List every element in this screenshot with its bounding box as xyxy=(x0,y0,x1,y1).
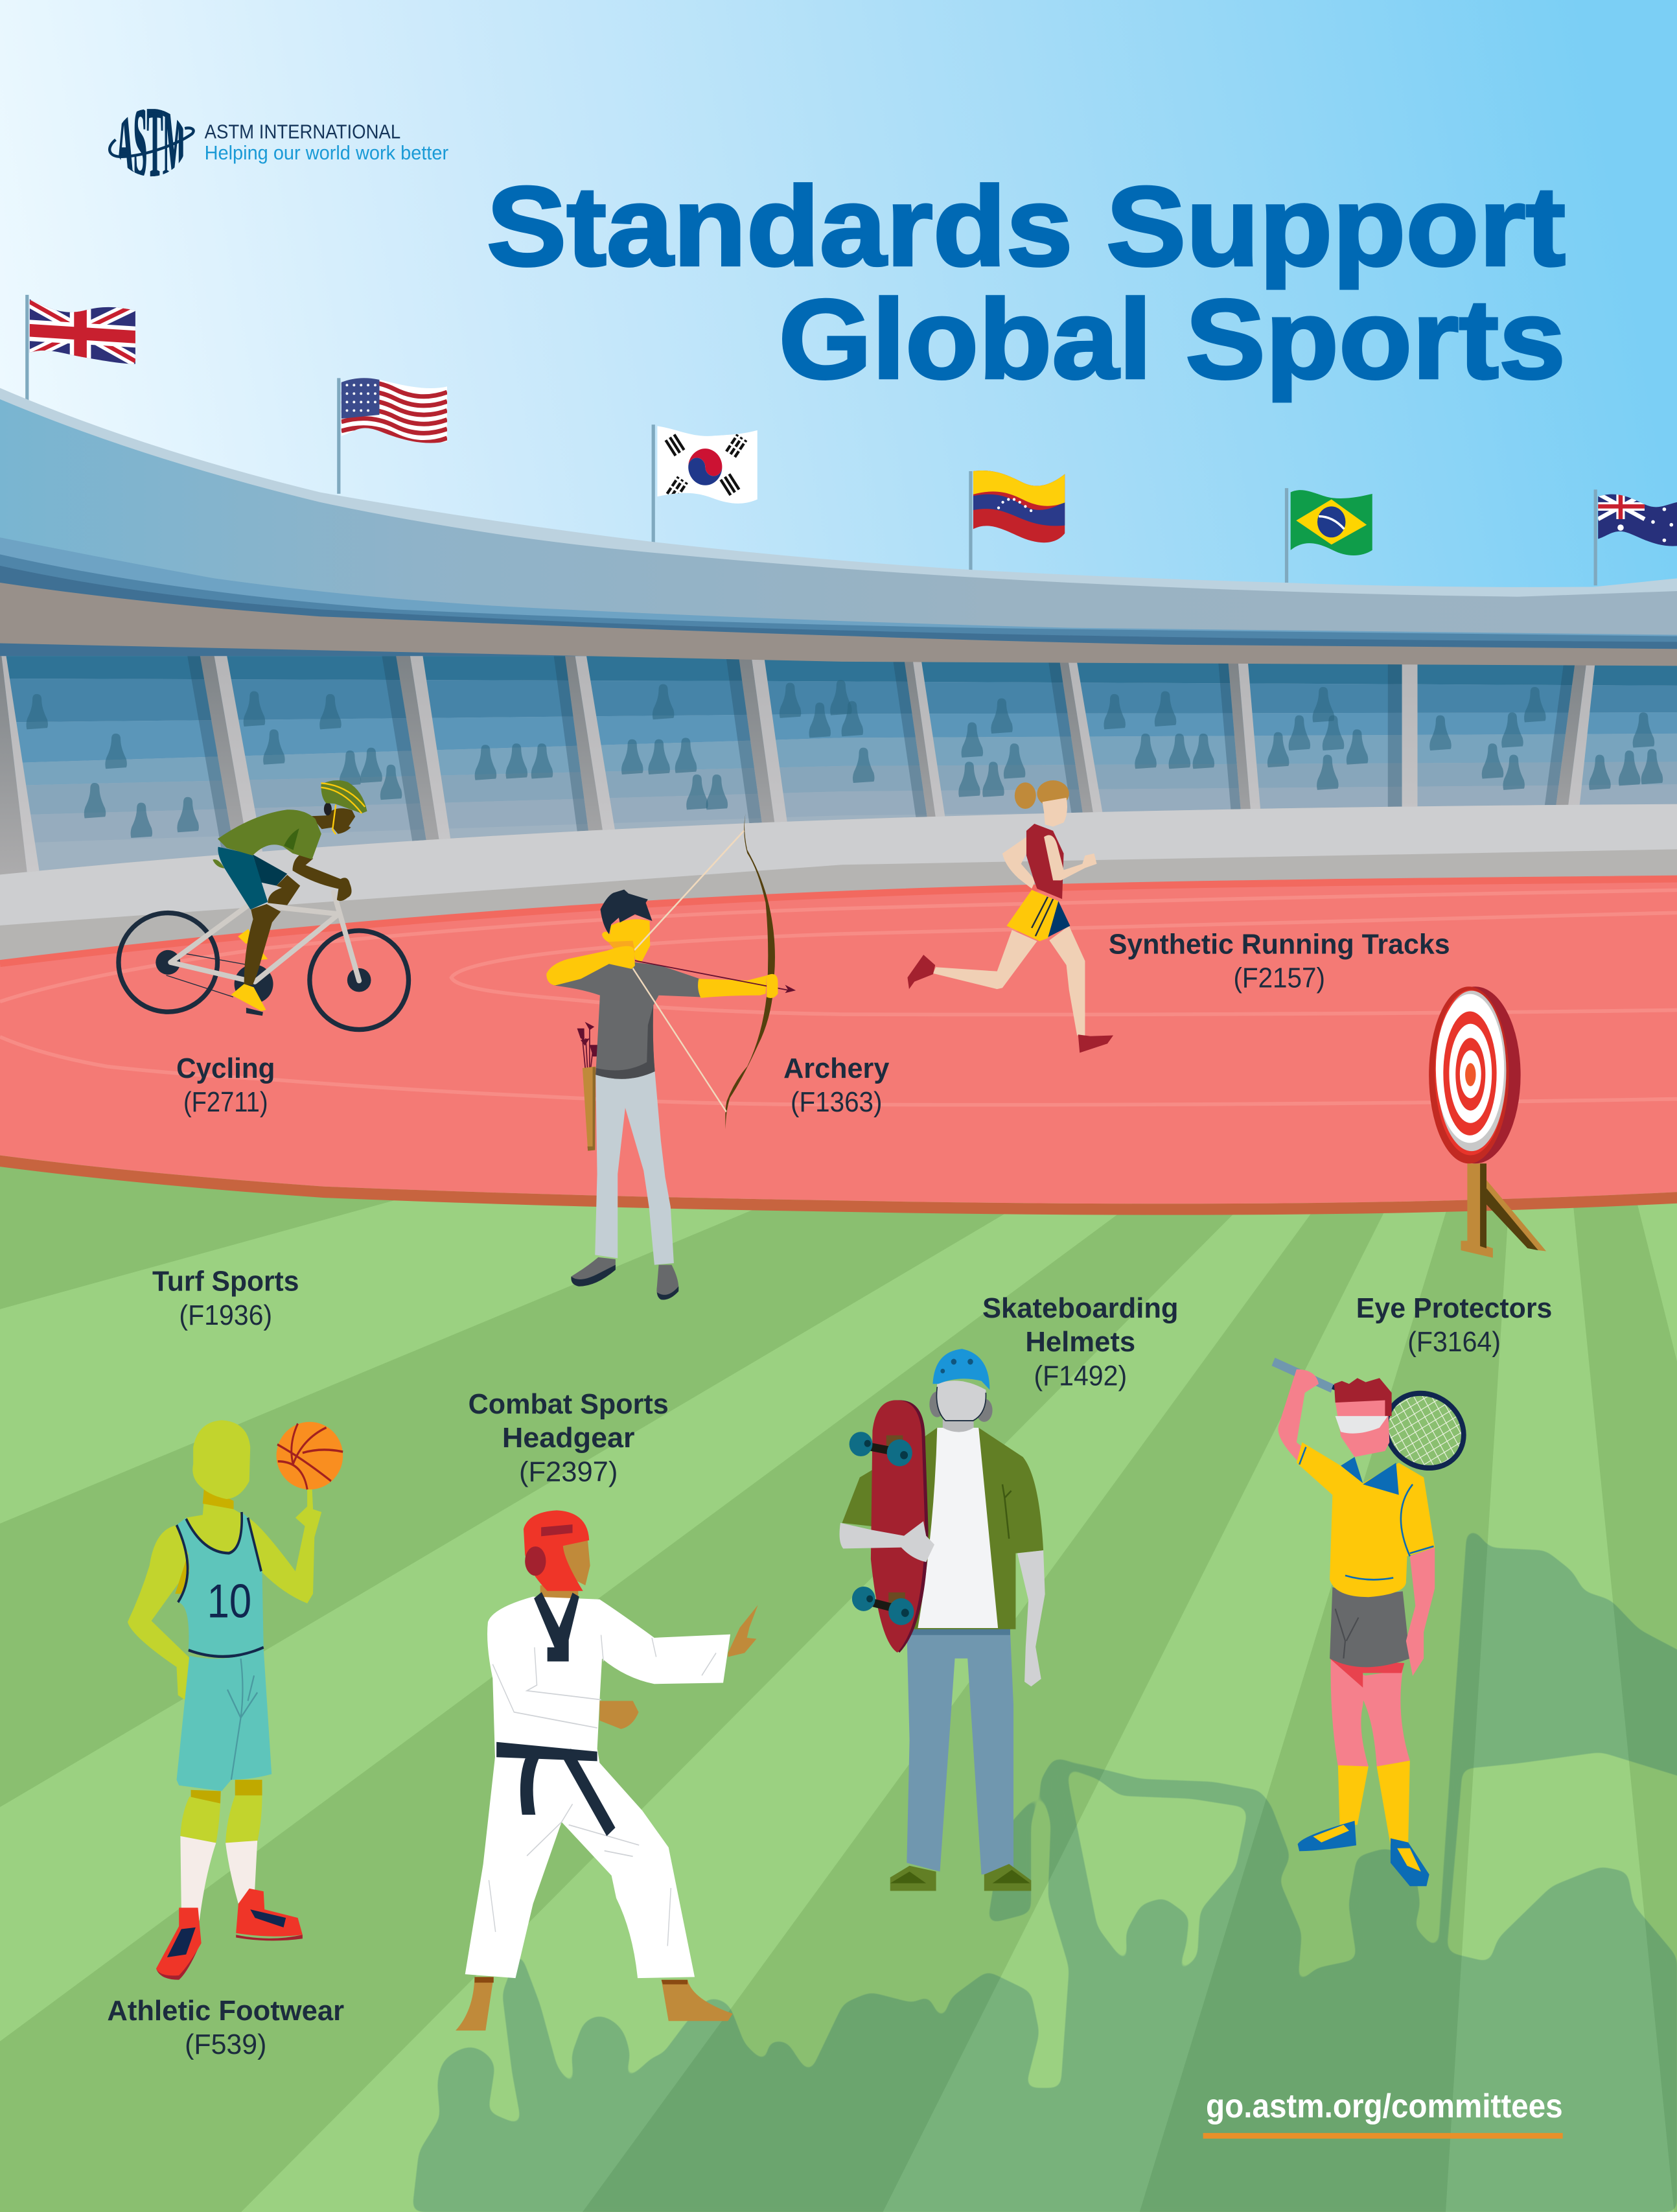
arrow xyxy=(635,960,789,990)
label: Archery: Archery xyxy=(783,1053,889,1084)
label: Skateboarding Helmets: (F1492) xyxy=(1034,1360,1127,1391)
label: Skateboarding Helmets: Helmets xyxy=(1025,1327,1135,1358)
bowstring xyxy=(633,831,744,1112)
skateboard xyxy=(850,1400,929,1653)
target face xyxy=(1430,986,1521,1163)
label: Skateboarding Helmets xyxy=(982,1293,1179,1391)
label: Synthetic Running Tracks: (F2157) xyxy=(1233,963,1325,994)
website link xyxy=(1203,2088,1563,2139)
top xyxy=(1026,824,1064,899)
icon: ASTM emblem xyxy=(108,109,195,176)
figure: cyclist xyxy=(119,780,409,1030)
shorts xyxy=(177,1649,272,1791)
logo name: ASTM INTERNATIONAL xyxy=(205,121,400,143)
legs xyxy=(1331,1659,1410,1767)
gi xyxy=(465,1596,730,1978)
label: Eye Protectors: (F3164) xyxy=(1407,1327,1501,1358)
shorts xyxy=(253,854,287,886)
turf stripes xyxy=(0,1192,1677,2212)
label: Combat Sports Headgear: Headgear xyxy=(502,1423,635,1454)
head xyxy=(602,919,650,962)
figure: skateboarder xyxy=(840,1349,1045,1891)
skin xyxy=(933,798,1085,1036)
stadium roof xyxy=(0,388,1677,666)
label: Archery xyxy=(783,1053,889,1118)
label: Eye Protectors: Eye Protectors xyxy=(1356,1293,1552,1324)
target stand xyxy=(1485,1180,1546,1251)
concrete beam xyxy=(0,583,1677,666)
roof highlight rim xyxy=(0,388,1677,634)
jersey number: 10 xyxy=(207,1576,251,1628)
front arm xyxy=(1044,835,1097,880)
label: Cycling: Cycling xyxy=(176,1053,275,1084)
logo: ASTM International xyxy=(108,109,448,176)
gi folds xyxy=(489,1635,716,1946)
hair xyxy=(1334,1378,1392,1416)
website link: go.astm.org/committees xyxy=(1206,2088,1563,2125)
label: Synthetic Running Tracks xyxy=(1109,929,1450,994)
near foot xyxy=(231,984,266,1011)
raised arm xyxy=(1278,1369,1343,1492)
hair xyxy=(1015,782,1036,809)
ball spin finger xyxy=(307,1489,313,1509)
hair xyxy=(601,890,653,934)
collar xyxy=(1341,1457,1399,1495)
icon: archery target xyxy=(1429,986,1546,1258)
jersey xyxy=(218,809,321,859)
sky background xyxy=(0,0,1677,988)
title xyxy=(487,163,1566,402)
goggles xyxy=(1336,1416,1388,1434)
flags row xyxy=(25,289,1677,585)
lane lines xyxy=(0,890,1677,1105)
collar xyxy=(534,1592,579,1661)
shorts xyxy=(1330,1587,1410,1667)
label: Combat Sports Headgear: (F2397) xyxy=(519,1456,618,1487)
shoes xyxy=(1298,1821,1429,1886)
crowd silhouettes xyxy=(412,1531,1677,2212)
label: Cycling: (F2711) xyxy=(183,1087,268,1118)
pillars xyxy=(0,644,1597,881)
neck and face xyxy=(943,1419,974,1432)
flag: United Kingdom xyxy=(25,294,135,401)
belt xyxy=(496,1742,616,1836)
label: Turf Sports: Turf Sports xyxy=(152,1266,299,1298)
label: Cycling xyxy=(176,1053,275,1118)
figure: tennis player xyxy=(1273,1362,1475,1886)
roof fascia xyxy=(0,537,1677,656)
figure: basketball player xyxy=(128,1420,343,1980)
flag: Australia xyxy=(1594,488,1677,585)
arms and torso xyxy=(128,1525,197,1705)
flag: Venezuela xyxy=(969,465,1069,570)
far leg xyxy=(268,875,300,905)
hair xyxy=(929,1391,945,1417)
shirt xyxy=(554,962,701,1079)
label: Athletic Footwear xyxy=(107,1996,344,2060)
helmet xyxy=(321,780,367,813)
helmet xyxy=(563,1541,590,1585)
label: Skateboarding Helmets: Skateboarding xyxy=(982,1293,1179,1324)
figure: combat athlete xyxy=(456,1510,758,2031)
arms xyxy=(546,946,635,985)
trousers xyxy=(595,1071,674,1265)
shorts xyxy=(1044,901,1070,939)
shoes xyxy=(571,1257,616,1286)
label: Combat Sports Headgear xyxy=(468,1389,669,1487)
t-shirt xyxy=(918,1428,998,1628)
head xyxy=(192,1420,250,1499)
socks xyxy=(180,1836,257,1920)
logo tagline: Helping our world work better xyxy=(205,142,448,164)
flag: Brazil xyxy=(1285,482,1375,583)
flag: South Korea xyxy=(652,421,761,543)
pocket seam xyxy=(1002,1484,1012,1539)
label: Turf Sports xyxy=(152,1266,299,1331)
far foot xyxy=(238,929,268,960)
label: Athletic Footwear: Athletic Footwear xyxy=(107,1996,344,2027)
bow hand xyxy=(767,974,778,998)
helmet xyxy=(932,1349,989,1390)
label: Turf Sports: (F1936) xyxy=(179,1300,272,1331)
turf field xyxy=(0,1128,1677,2212)
racket xyxy=(1273,1362,1475,1481)
figure: archer xyxy=(546,813,796,1300)
flag: United States xyxy=(337,373,452,494)
jeans xyxy=(907,1631,1013,1874)
label: Synthetic Running Tracks: Synthetic Running Tracks xyxy=(1109,929,1450,960)
right arm xyxy=(1017,1550,1045,1686)
head xyxy=(311,808,355,834)
left arm xyxy=(840,1521,934,1562)
stadium stands xyxy=(0,621,1677,881)
socks xyxy=(1338,1761,1410,1845)
shoes xyxy=(907,955,1113,1053)
running track xyxy=(0,876,1677,1215)
arm xyxy=(293,854,352,901)
left arm xyxy=(1406,1548,1435,1676)
bicycle xyxy=(119,859,409,1030)
title: Global Sports xyxy=(778,275,1566,402)
seating bands xyxy=(0,621,1677,875)
figure: runner xyxy=(907,780,1113,1053)
legs xyxy=(191,1780,262,1804)
inner shorts xyxy=(1330,1659,1404,1688)
near leg xyxy=(244,904,281,985)
spectators xyxy=(26,680,1663,838)
label: Combat Sports Headgear: Combat Sports xyxy=(468,1389,669,1420)
bow xyxy=(725,813,775,1129)
shirt xyxy=(1297,1442,1435,1597)
skin xyxy=(456,1585,758,2031)
perimeter wall xyxy=(0,804,1677,988)
sneakers xyxy=(156,1889,303,1980)
jersey xyxy=(177,1512,264,1655)
shoes xyxy=(890,1864,1031,1891)
icon: ASTM emblem: ASTM xyxy=(117,87,185,198)
quiver and arrows xyxy=(577,1022,599,1151)
roof canopy xyxy=(0,399,1677,634)
head xyxy=(1336,1399,1389,1457)
label: Athletic Footwear: (F539) xyxy=(185,2029,266,2060)
label: Eye Protectors xyxy=(1356,1293,1552,1358)
title: Standards Support xyxy=(487,163,1566,289)
jacket xyxy=(842,1428,1043,1629)
basketball xyxy=(277,1422,343,1489)
label: Archery: (F1363) xyxy=(791,1087,882,1118)
